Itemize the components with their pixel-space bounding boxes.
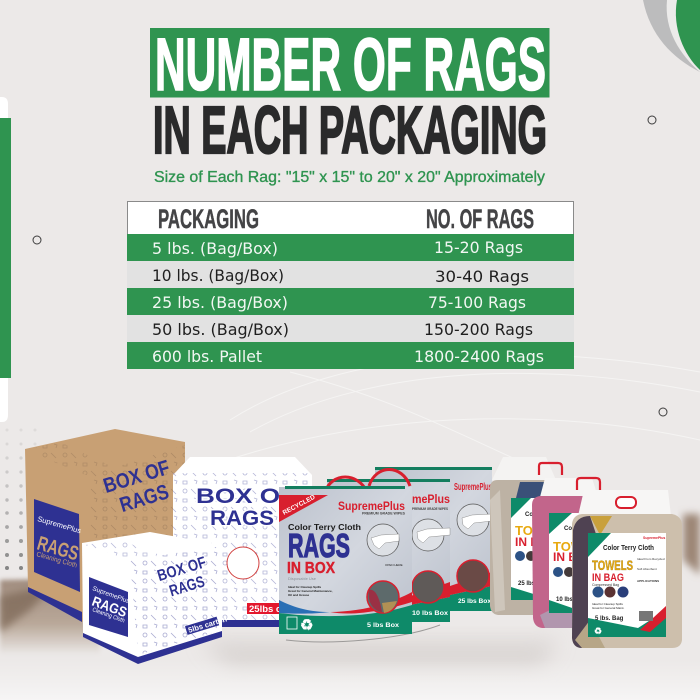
product: large cardboard box (25, 429, 185, 622)
product: 5 lbs rags in box: PREMIUM GRADE WIPES (362, 512, 406, 516)
table header: NO. OF RAGS (426, 204, 534, 234)
table header: PACKAGING (158, 204, 259, 234)
product: 10 lbs rags in box (327, 479, 450, 622)
product: 5 lbs rags in box (279, 470, 412, 634)
medium box title: BOX OF (196, 485, 296, 508)
bag label: Color Terry Cloth (603, 543, 654, 552)
small box carton label: 5lbs carton (187, 614, 228, 635)
medium box title (196, 485, 296, 530)
product: 25 lbs towels in bag (490, 457, 562, 615)
bag label: ♻ (594, 626, 602, 636)
product: small white box (82, 532, 228, 664)
row: 25 lbs: 75-100 Rags (428, 293, 526, 312)
background wood surface (0, 514, 700, 700)
recycle icon (287, 617, 313, 634)
rag photo circle (367, 581, 399, 613)
row: 50 lbs: 150-200 Rags (424, 320, 533, 339)
left edge panel (0, 97, 11, 422)
bag label: Soft Absorbent (637, 567, 657, 571)
small box navy label (89, 577, 131, 637)
row: 50 lbs (127, 315, 574, 342)
row: 10 lbs: 30-40 Rags (435, 267, 529, 286)
product: 5 lbs rags in box: Disposable Use (288, 576, 317, 581)
product: 5 lbs rags in box: Color Terry Cloth (288, 522, 361, 532)
row: 600 lbs pallet: 600 lbs. Pallet (152, 347, 262, 366)
top-right corner shape (643, 0, 700, 72)
row: 50 lbs: 50 lbs. (Bag/Box) (152, 320, 289, 339)
bag label: APPLICATIONS (637, 579, 659, 583)
small box side text (155, 554, 214, 602)
open-here window (367, 524, 399, 556)
subtitle: Size of Each Rag: "15" x 15" to 20" x 20" Approximately (154, 169, 545, 186)
row: 25 lbs: 25 lbs. (Bag/Box) (152, 293, 288, 312)
cardboard box navy label: SupremePlus (36, 514, 82, 535)
product: 25 lbs rags in box (375, 467, 492, 611)
product: 5 lbs towels in bag (572, 490, 682, 648)
recycle icon: ♻ (300, 617, 313, 634)
bag label: Ideal From Recycled (637, 557, 665, 561)
row: 10 lbs (127, 261, 574, 288)
product: 25 lbs towels in bag: IN B (515, 535, 539, 549)
medium box title: RAGS (210, 507, 274, 530)
product: 5 lbs rags in box: OPEN HERE (385, 563, 403, 567)
cardboard box side text: RAGS (117, 480, 172, 517)
small box navy label: SupremePlus (91, 585, 131, 605)
box handles (325, 470, 410, 492)
product: 5 lbs rags in box: Ideal for Cleanup Spills (288, 585, 322, 589)
row: 5 lbs: 5 lbs. (Bag/Box) (152, 239, 278, 258)
product: 10 lbs rags in box: mePlus (412, 494, 450, 506)
bag label: TOWELS (592, 557, 633, 573)
row: 10 lbs: 10 lbs. (Bag/Box) (152, 266, 284, 285)
bag handle (616, 497, 636, 508)
packaging table (127, 202, 574, 369)
cardboard box side text (101, 456, 179, 520)
bag label: SupremePlus (643, 536, 665, 540)
bag label (588, 533, 666, 637)
product: 5 lbs rags in box: Great for General Maintenance, (288, 589, 333, 593)
product: 10 lbs towels in bag: Col (564, 526, 574, 532)
dot grid (5, 428, 36, 570)
product: 25 lbs towels in bag: Color (525, 512, 541, 518)
row: 600 lbs pallet: 1800-2400 Rags (414, 347, 544, 366)
small box side text: BOX OF (155, 554, 208, 585)
product: 25 lbs towels in bag: TOW (515, 523, 546, 538)
product: 5 lbs rags in box: SupremePlus (338, 499, 405, 513)
small box navy label: RAGS (90, 593, 129, 620)
table header (128, 202, 574, 234)
product: medium white box (173, 457, 312, 627)
cardboard box navy label (34, 499, 82, 592)
product: 5 lbs rags in box: RAGS (288, 527, 350, 564)
small box navy label: Cleaning Cloth (91, 607, 125, 625)
recycled ribbon: RECYCLED (282, 494, 317, 517)
bag label: IN BAG (592, 572, 624, 584)
product: 5 lbs rags in box: Oil and Grease (288, 593, 310, 597)
decorative ring markers (33, 116, 667, 416)
cardboard box navy label: Cleaning Cloth (35, 551, 78, 570)
product: 5 lbs rags in box: IN BOX (287, 560, 335, 577)
product: 25 lbs towels in bag: 25 lbs. (518, 581, 537, 587)
row: 600 lbs pallet (127, 342, 574, 369)
cardboard box side text: BOX OF (101, 456, 173, 498)
bag label: Ideal for Cleanup Spills (592, 602, 623, 606)
recycled ribbon (279, 494, 328, 522)
product: 10 lbs rags in box: 10 lbs Box (412, 610, 448, 617)
product: 25 lbs rags in box: 25 lbs Box (458, 598, 491, 605)
curved shadow line under boxes (286, 625, 440, 642)
medium box red label: 25lbs carton (249, 604, 305, 615)
product: 10 lbs towels in bag: TOW (553, 539, 584, 554)
row: 5 lbs: 15-20 Rags (434, 238, 523, 257)
product: 10 lbs towels in bag: IN B (553, 550, 577, 564)
medium box window circle (227, 547, 259, 579)
title (150, 23, 550, 168)
bag label: 5 lbs. Bag (595, 616, 624, 622)
product: 10 lbs towels in bag (532, 478, 600, 628)
bag label: Great for General Maint. (592, 606, 625, 610)
product: 10 lbs rags in box: PREMIUM GRADE WIPES (412, 507, 449, 511)
background swoosh lines (200, 355, 700, 470)
product: 5 lbs rags in box: 5 lbs Box (367, 622, 399, 629)
cardboard box navy label: RAGS (35, 533, 81, 565)
product: 25 lbs rags in box: SupremePlus (454, 482, 492, 493)
small box side text: RAGS (167, 573, 207, 600)
bag label: Compressed Bag (592, 583, 619, 587)
row: 25 lbs (127, 288, 574, 315)
product: 10 lbs towels in bag: 10 lbs. (556, 597, 575, 603)
row: 5 lbs (127, 234, 574, 261)
